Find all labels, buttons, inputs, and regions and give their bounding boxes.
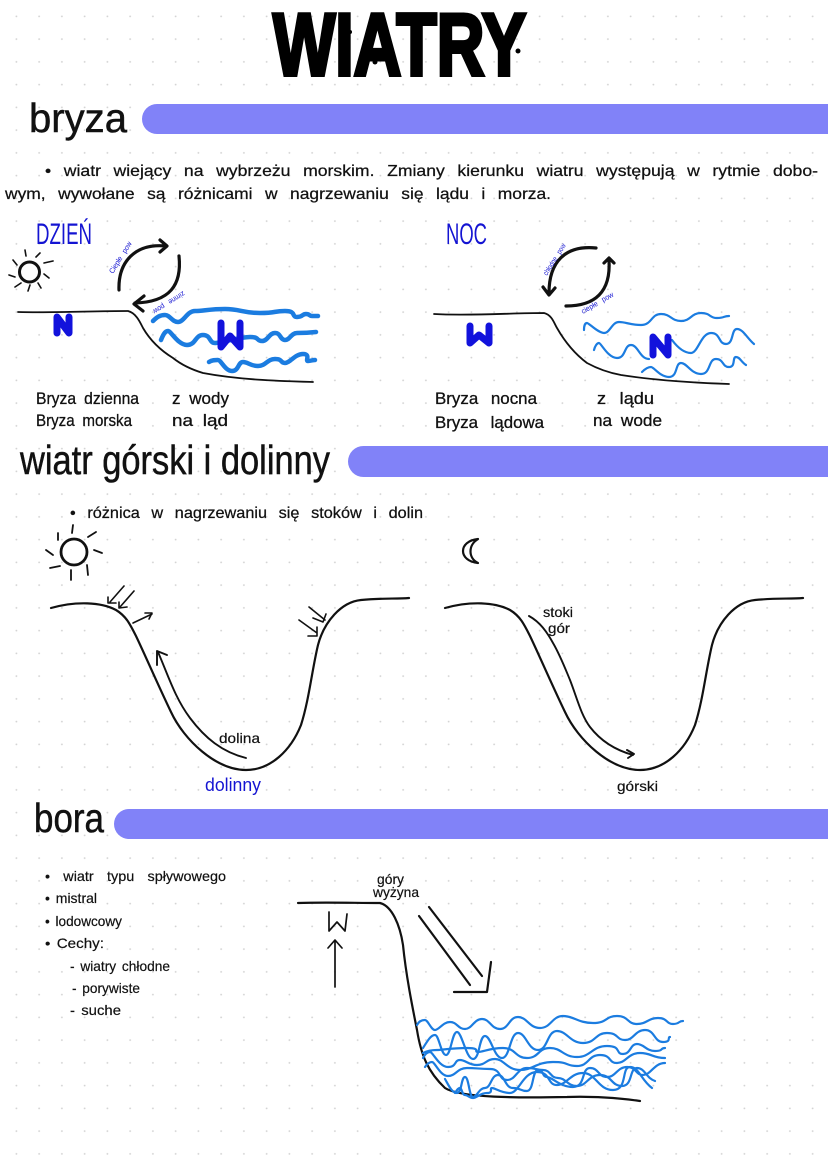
arrow: sunlight left xyxy=(108,586,134,608)
water waves xyxy=(584,313,754,377)
water waves xyxy=(153,309,318,371)
icon: moon xyxy=(463,539,478,563)
text block: bora features: - wiatry chłodne xyxy=(70,958,170,974)
diagram: bora xyxy=(298,871,683,1101)
heading: bryza: bryza xyxy=(29,95,127,141)
text block: bora features: • Cechy: xyxy=(45,935,104,951)
arrow: sunlight right xyxy=(299,607,326,636)
text block: bryza definition: • wiatr wiejący na wybrzeżu morskim. Zmiany kierunku wiatru występują w rytmie dobo- xyxy=(45,163,818,180)
text: night breeze names xyxy=(435,389,662,432)
arrow: valley wind upward xyxy=(157,651,246,758)
text: day breeze names: Bryza dzienna xyxy=(36,389,139,408)
diagram: day breeze xyxy=(9,218,318,430)
label: góry wyżyna: wyżyna xyxy=(372,884,419,900)
text: night breeze names: Bryza nocna xyxy=(435,389,538,408)
heading: wiatr górski i dolinny: wiatr górski i dolinny xyxy=(19,437,330,483)
label: stoki gór: gór xyxy=(548,620,570,636)
label: cold air: zimne pow xyxy=(151,289,187,316)
text: day breeze names: na ląd xyxy=(172,411,228,430)
text block: bora features xyxy=(45,868,226,1018)
letter W xyxy=(329,912,347,931)
valley profile xyxy=(445,598,803,770)
text block: bora features: - suche xyxy=(70,1002,121,1018)
text block: mountain wind cause: • różnica w nagrzewaniu się stoków i dolin xyxy=(70,505,423,522)
text: day breeze names: Bryza morska xyxy=(36,411,132,430)
label: góry wyżyna xyxy=(372,871,419,900)
text: day breeze names: z wody xyxy=(172,389,229,408)
label: góry wyżyna: góry xyxy=(377,871,404,887)
letter W: high pressure over land xyxy=(470,326,489,343)
arrow: heat left xyxy=(133,613,152,623)
text: day breeze names xyxy=(36,389,229,430)
text block: bora features: • lodowcowy xyxy=(45,913,122,929)
coastline slope xyxy=(298,903,640,1101)
letter N: low pressure over water xyxy=(653,337,668,355)
letter N: low pressure over land xyxy=(57,317,69,333)
label: warm air: ciepłe pow xyxy=(580,290,616,316)
label: stoki gór xyxy=(543,604,573,636)
water waves xyxy=(417,1016,683,1098)
label: stoki gór: stoki xyxy=(543,604,573,620)
label: dolina: dolina xyxy=(219,730,260,746)
heading bar: wiatr górski i dolinny xyxy=(348,446,828,477)
icon: sun xyxy=(9,250,53,291)
heading bar: bryza xyxy=(142,104,828,134)
label: górski: górski xyxy=(617,778,658,794)
text block: bora features: - porywiste xyxy=(72,980,140,996)
text block: bora features: • mistral xyxy=(45,890,97,906)
text block: bora features: • wiatr typu spływowego xyxy=(45,868,226,884)
arrow: up xyxy=(328,940,342,987)
label: NOC: NOC xyxy=(446,218,487,251)
label: warm air: Ciepłe pow xyxy=(107,239,134,275)
heading bar: bora xyxy=(114,809,828,839)
circulation arrows xyxy=(119,240,179,311)
coastline xyxy=(434,313,729,384)
valley profile xyxy=(51,598,409,770)
label: dolinny: dolinny xyxy=(205,775,261,795)
diagram: mountain wind xyxy=(445,539,803,794)
arrow: large downslope xyxy=(419,907,491,992)
coastline xyxy=(18,311,313,382)
text block: bryza definition xyxy=(4,163,818,203)
label: DZIEŃ: DZIEŃ xyxy=(36,218,92,251)
arrow: mountain wind downward xyxy=(529,616,634,758)
diagram: valley wind xyxy=(46,525,409,795)
letter W: high pressure over water xyxy=(221,323,240,347)
text: night breeze names: Bryza lądowa xyxy=(435,413,545,432)
text: night breeze names: na wode xyxy=(593,411,662,430)
heading: bora: bora xyxy=(34,795,104,841)
text block: bryza definition: wym, wywołane są różnicami w nagrzewaniu się lądu i morza. xyxy=(4,186,551,203)
icon: sun xyxy=(46,525,102,580)
text: night breeze names: z lądu xyxy=(597,389,654,408)
label: cold air: chłodne pow xyxy=(541,241,568,277)
diagram: night breeze xyxy=(434,218,754,432)
circulation arrows xyxy=(543,248,614,306)
